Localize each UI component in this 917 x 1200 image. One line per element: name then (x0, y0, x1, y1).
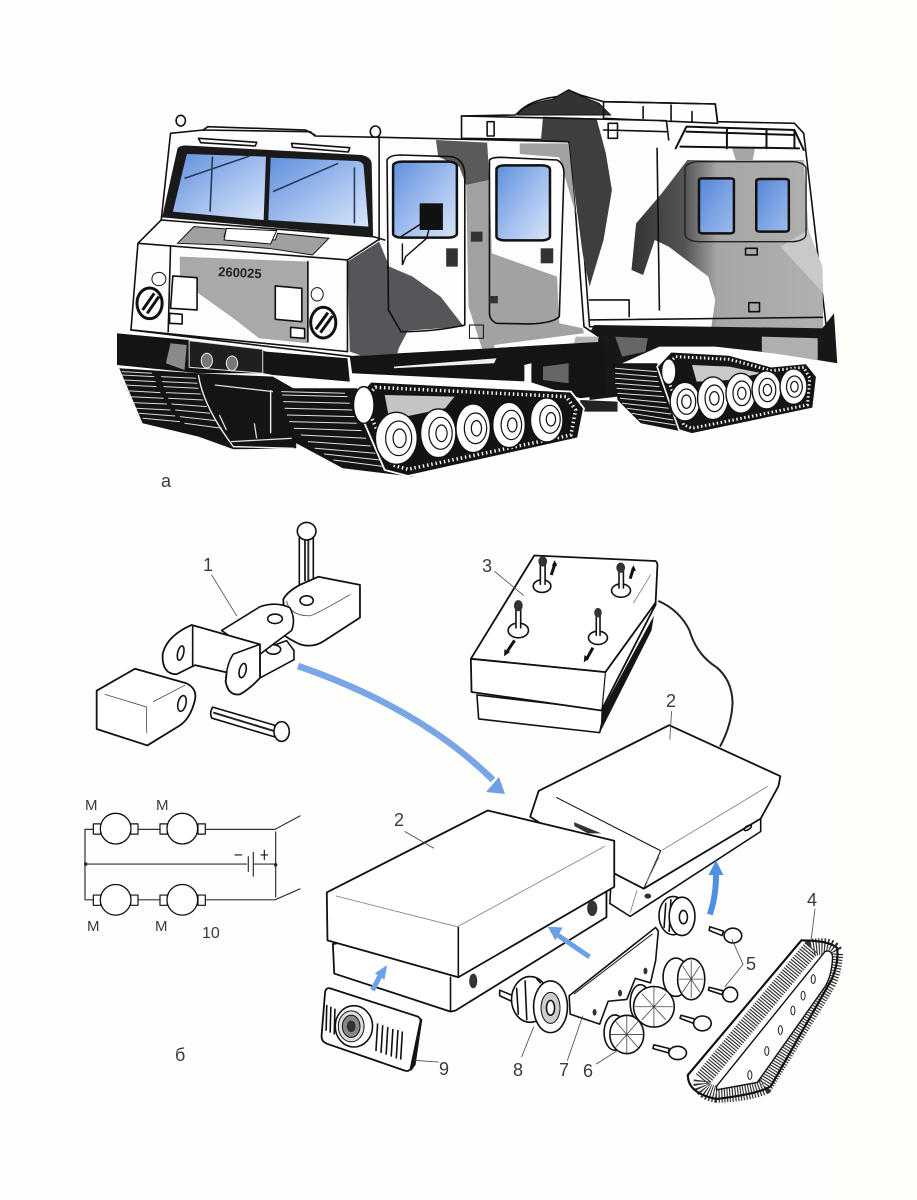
roof rack (676, 127, 804, 150)
loose pin (211, 707, 289, 741)
pin (297, 522, 316, 585)
rear unit body (462, 90, 827, 333)
vehicle number: 260025 (218, 264, 262, 281)
cab door left (387, 155, 465, 332)
main front track (278, 382, 584, 477)
label 7: 7 (559, 1060, 569, 1080)
road wheels 6 (596, 896, 705, 1064)
rear window right (756, 179, 789, 232)
large blue arrow (298, 666, 505, 794)
label 4: 4 (807, 890, 817, 910)
left block (97, 669, 195, 745)
label 9: 9 (439, 1059, 449, 1079)
right block (283, 577, 360, 646)
motors (93, 813, 205, 915)
label 8: 8 (513, 1060, 523, 1080)
rear bumper and hull (587, 313, 837, 400)
control box 3 (471, 555, 657, 733)
illustration a: tracked vehicle (117, 90, 837, 477)
circuit diagram 10: М (155, 918, 168, 935)
label 10: 10 (202, 925, 220, 942)
leader 1 (212, 575, 237, 616)
upper plate (222, 604, 293, 654)
rear windows frame (685, 162, 806, 242)
windshield (162, 146, 373, 237)
front bumper (117, 333, 350, 382)
label b: б (175, 1045, 185, 1065)
headlights and lamps (137, 272, 336, 338)
cab door right (469, 157, 564, 338)
label 6: 6 (583, 1061, 593, 1081)
circuit diagram 10: М (87, 918, 100, 935)
antenna eyelets (176, 115, 381, 152)
label a: а (161, 471, 172, 491)
cable (658, 601, 733, 747)
bracket (163, 625, 260, 695)
hood with grilles (178, 227, 329, 255)
lamp 9 (322, 988, 439, 1071)
circuit diagram 10: М (85, 797, 98, 814)
lower plate (260, 641, 294, 678)
bolts 5 (653, 927, 743, 1060)
box 2 upper (530, 712, 780, 916)
rear window left (699, 178, 734, 233)
rear track (613, 352, 817, 434)
parts group: control box, batteries, suspension (322, 555, 838, 1099)
label 2 upper: 2 (666, 691, 676, 711)
front left tracks (119, 368, 296, 449)
circuit diagram 10 (84, 797, 300, 942)
circuit diagram 10: М (156, 797, 168, 814)
label 2 front: 2 (394, 810, 404, 830)
hull under cab (350, 342, 606, 398)
box 2 front (327, 810, 614, 1012)
sprocket 8 (500, 977, 567, 1057)
wiring (85, 816, 300, 900)
label 3: 3 (482, 556, 492, 576)
cab body (131, 130, 599, 367)
part 1: hinge assembly (97, 522, 360, 745)
assembly arrows (373, 860, 723, 990)
track 4 (688, 909, 838, 1099)
label 1: 1 (203, 555, 213, 575)
label 5: 5 (746, 954, 756, 974)
bracket plate 7 (567, 927, 658, 1060)
